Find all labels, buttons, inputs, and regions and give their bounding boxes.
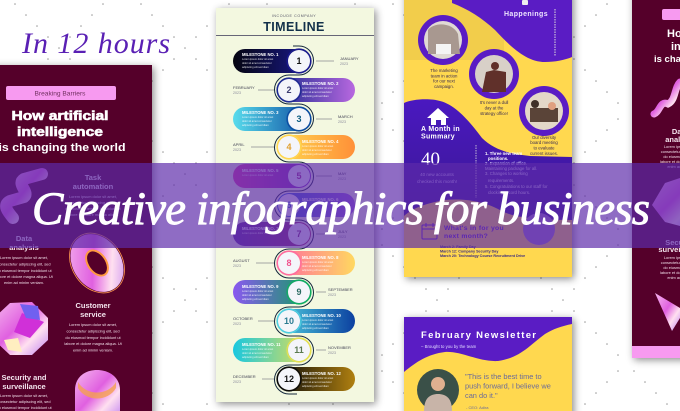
milestone 11: 11 [294,345,304,355]
milestone 7: MILESTONE NO. 7 [242,226,279,231]
icon: calendar [422,223,437,239]
milestone 10: Lorem ipsum dolor sit amet [302,318,334,322]
milestone 3: adipiscing elit sed diam [242,123,269,127]
milestone 11: MILESTONE NO. 11 [242,342,281,347]
milestone 8: MILESTONE NO. 8 [302,255,339,260]
timeline connector [274,46,314,394]
panel: AI poster right [632,0,680,358]
milestone 11: dolor sit amet consectetur [242,351,272,355]
milestone 1: JANUARY [340,56,359,61]
milestone 12: adipiscing elit sed diam [302,384,329,388]
panel: AI poster left [0,65,152,411]
milestone 4: APRIL [233,142,245,147]
text: customer service: service [80,310,106,319]
panel: newsletter poster [404,0,572,277]
text: task automation: Lorem ipsum dolor sit amet, [69,194,117,199]
month in summary: checked this month! [417,179,457,184]
text: data analysis [0,234,54,285]
milestone 8: 8 [286,258,292,268]
caption: diversity meeting [530,135,558,156]
milestone 1: dolor sit amet consectetur [242,61,272,65]
milestone 1: Lorem ipsum dolor sit amet [242,57,274,61]
icon: right prism [655,293,680,331]
milestone 4 [233,135,355,159]
text: security and surveillance: surveillance [2,382,46,391]
milestone 7: 2023 [338,235,346,239]
march dates: March 2: Family Day [440,245,477,249]
milestone 12: Lorem ipsum dolor sit amet [302,376,334,380]
month in summary [417,126,460,184]
purple wave with Happenings: Happenings [504,11,548,18]
milestone 6: JUNE [233,200,244,205]
bottom-left purple city section [404,99,572,225]
caption: strategy office: day at the [485,106,504,110]
march dates [440,245,525,258]
milestone 9: MILESTONE NO. 9 [242,284,279,289]
quote: push forward, I believe we [465,382,551,390]
text: data analysis: Lorem ipsum dolor sit amet, [0,255,48,260]
next month heading [444,225,504,240]
milestone 1: 2023 [340,62,348,66]
caption: marketing team: for our next [433,78,456,84]
text: security and surveillance [0,373,52,410]
poster title: intelligence [17,124,103,139]
caption: strategy office: strategy office! [480,111,508,116]
milestone 8 [233,251,355,275]
milestone 9: SEPTEMBER [328,287,353,292]
milestone 1: adipiscing elit sed diam [242,65,269,69]
march dates: March 12: Company Security Day [440,250,499,254]
summary list: 2. Expansion of office. [485,161,527,166]
milestone 8: AUGUST [233,258,250,263]
milestone 6 [233,193,355,217]
purple wave with Happenings [452,0,572,62]
text: data analysis: enim ad minim veniam. [4,280,44,285]
quote [465,372,551,410]
milestone 12: 2023 [233,380,241,384]
milestone 5: 5 [296,171,302,181]
panel: timeline [216,8,374,402]
milestone 12: dolor sit amet consectetur [302,380,332,384]
timeline header [216,14,374,36]
milestone 4: adipiscing elit sed diam [302,152,329,156]
icon: worm [6,174,42,218]
milestone 4: dolor sit amet consectetur [302,148,332,152]
milestone 3: dolor sit amet consectetur [242,119,272,123]
banner title: Creative infographics for business [32,183,650,235]
milestone 3: 2023 [338,120,346,124]
milestone 11: adipiscing elit sed diam [242,355,269,359]
milestone 2: MILESTONE NO. 2 [302,81,339,86]
caption: marketing team: team in action [431,74,458,78]
milestone 5: MAY [338,171,347,176]
photo: CEO [417,369,459,411]
newsletter subtitle: – Brought to you by the team [421,344,477,349]
text: customer service: enim ad minim veniam. [73,348,113,352]
milestone 7 [233,222,348,246]
icon: right gem [652,178,680,226]
caption: diversity meeting: to evaluate [533,146,555,150]
caption: diversity meeting: Our diversity [532,135,557,140]
milestone 2 [233,78,355,102]
milestone 10: MILESTONE NO. 10 [302,313,341,318]
label: Breaking Barriers [6,86,116,100]
poster title [0,108,126,154]
summary list: positions. [488,156,508,161]
milestone 5: 2023 [338,177,346,181]
milestone 9: Lorem ipsum dolor sit amet [242,289,274,293]
summary list: clocking record hours. [488,190,530,195]
text: data analysis: analysis [9,243,39,252]
milestone 2: Lorem ipsum dolor sit amet [302,86,334,90]
month in summary: Summary [421,134,455,140]
text: task automation: do eiusmod tempor incididunt ut [65,206,121,211]
milestone 4: Lorem ipsum dolor sit amet [302,144,334,148]
right title [654,28,680,65]
milestone 1 [233,49,359,73]
text: security and surveillance: Lorem ipsum dolor sit amet, [0,393,48,398]
summary list [485,151,548,195]
text: task automation: Task [85,173,102,182]
milestone 11: Lorem ipsum dolor sit amet [242,347,274,351]
photo: marketing team [418,15,468,65]
milestone 10: dolor sit amet consectetur [302,322,332,326]
milestone 8: dolor sit amet consectetur [302,264,332,268]
milestone 8: 2023 [233,264,241,268]
summary list: 5. Congratulations to our staff for [485,184,548,189]
text: customer service: do eiusmod tempor incididunt ut [65,335,121,340]
milestone 11: NOVEMBER [328,345,351,350]
milestone 9: 2023 [328,293,336,297]
milestone 2: dolor sit amet consectetur [302,90,332,94]
milestone 7: Lorem ipsum dolor sit amet [242,231,274,235]
milestone 3 [233,107,353,131]
label: Breaking Barriers: Breaking Barriers [35,90,86,98]
icon: right worm [654,82,680,114]
next month heading: What's in for you [444,225,504,232]
milestone 2: 2 [286,85,292,95]
milestone 9 [233,280,353,304]
text: task automation: automation [73,182,114,191]
milestone 6: 6 [286,200,292,210]
milestone 2: 2023 [233,91,241,95]
milestone 12: DECEMBER [233,374,256,379]
next month heading: next month? [444,233,488,240]
milestone 1: 1 [296,56,302,66]
panel: february newsletter [404,317,572,411]
text: data analysis: Data [16,234,33,243]
milestone 12: MILESTONE NO. 12 [302,371,341,376]
text: task automation: labore et dolore magna aliqua. [67,212,119,217]
quote: "This is the best time to [465,372,542,381]
text: task automation: consectetur adipiscing elit, sed [66,200,120,205]
caption: strategy office [480,100,508,116]
milestone 5: Lorem ipsum dolor sit amet [242,173,274,177]
icon: gem [0,302,48,355]
milestone 6: MILESTONE NO. 6 [302,197,339,202]
photo: next month [523,213,555,245]
text: customer service [64,301,123,352]
milestone 11: 2023 [328,351,336,355]
banner: purple band [0,163,680,248]
caption: marketing team [430,68,458,89]
photo: strategy office [469,49,519,99]
icon: house [427,108,449,125]
bottom yellow section [404,199,572,277]
quote: can do it." [465,391,498,400]
milestone 10: adipiscing elit sed diam [302,326,329,330]
purple header wave [404,317,572,372]
milestone 5: MILESTONE NO. 5 [242,168,279,173]
milestone 4: MILESTONE NO. 4 [302,139,339,144]
caption: diversity meeting: board meeting [530,140,558,145]
milestone 8: Lorem ipsum dolor sit amet [302,260,334,264]
milestone 4: 4 [286,142,292,152]
month in summary: 40 [421,149,440,170]
summary list: 3. Changes to working [485,171,528,176]
right data analysis text [660,127,680,169]
text: customer service: Customer [75,301,111,310]
march dates: March 20: Technology Course Recruitment Drive [440,254,525,258]
milestone 12 [233,367,355,391]
poster title: is changing the world [0,142,126,154]
milestone 3: Lorem ipsum dolor sit amet [242,115,274,119]
milestone 3: 3 [296,114,302,124]
milestone 3: MARCH [338,114,353,119]
milestone 9: adipiscing elit sed diam [242,297,269,301]
heading: In 12 hours: In 12 hours [21,27,170,60]
caption: marketing team: campaign. [434,84,454,89]
timeline header: INCOUDE COMPANY [272,14,316,18]
caption: strategy office: It's never a dull [480,100,508,105]
icon: donut [58,222,136,304]
milestone 1: MILESTONE NO. 1 [242,52,279,57]
summary list: Maintaining package for all. [485,166,537,171]
milestone 10: OCTOBER [233,316,253,321]
milestone 7: 7 [296,229,302,239]
right label [662,9,680,20]
photo: diversity meeting [519,86,569,136]
text: customer service: Lorem ipsum dolor sit amet, [69,322,117,327]
milestone 7: JULY [338,229,348,234]
milestone 8: adipiscing elit sed diam [302,268,329,272]
caption: marketing team: The marketing [430,68,458,73]
milestone 10 [233,309,355,333]
right security text [658,238,680,280]
timeline header: TIMELINE [263,20,325,34]
milestone 5 [233,164,347,188]
text: task automation [65,173,121,217]
icon: cylinder [75,370,120,411]
milestone 10: 2023 [233,322,241,326]
month in summary: A Month in [421,126,460,133]
milestone 9: 9 [296,287,302,297]
poster title: How artificial [12,108,108,123]
pink footer strip [632,346,680,358]
text: security and surveillance: Security and [1,373,47,382]
summary list: 1. Three new team [485,151,522,156]
caption: diversity meeting: current issues. [530,151,558,156]
text: customer service: consectetur adipiscing elit, sed [66,328,120,334]
milestone 9: dolor sit amet consectetur [242,293,272,297]
milestone 2: adipiscing elit sed diam [302,94,329,98]
milestone 4: 2023 [233,148,241,152]
text: customer service: labore et dolore magna aliqua. Ut [64,341,123,346]
quote: - CEO: Adira [466,405,489,410]
month in summary: 40 new accounts [420,172,455,177]
milestone 12: 12 [284,374,294,384]
newsletter title: February Newsletter [421,330,536,341]
milestone 3: MILESTONE NO. 3 [242,110,279,115]
divider line [475,145,477,198]
milestone 10: 10 [284,316,294,326]
summary list: requirements. [488,178,514,183]
milestone 2: FEBRUARY [233,85,255,90]
milestone 11 [233,338,351,362]
